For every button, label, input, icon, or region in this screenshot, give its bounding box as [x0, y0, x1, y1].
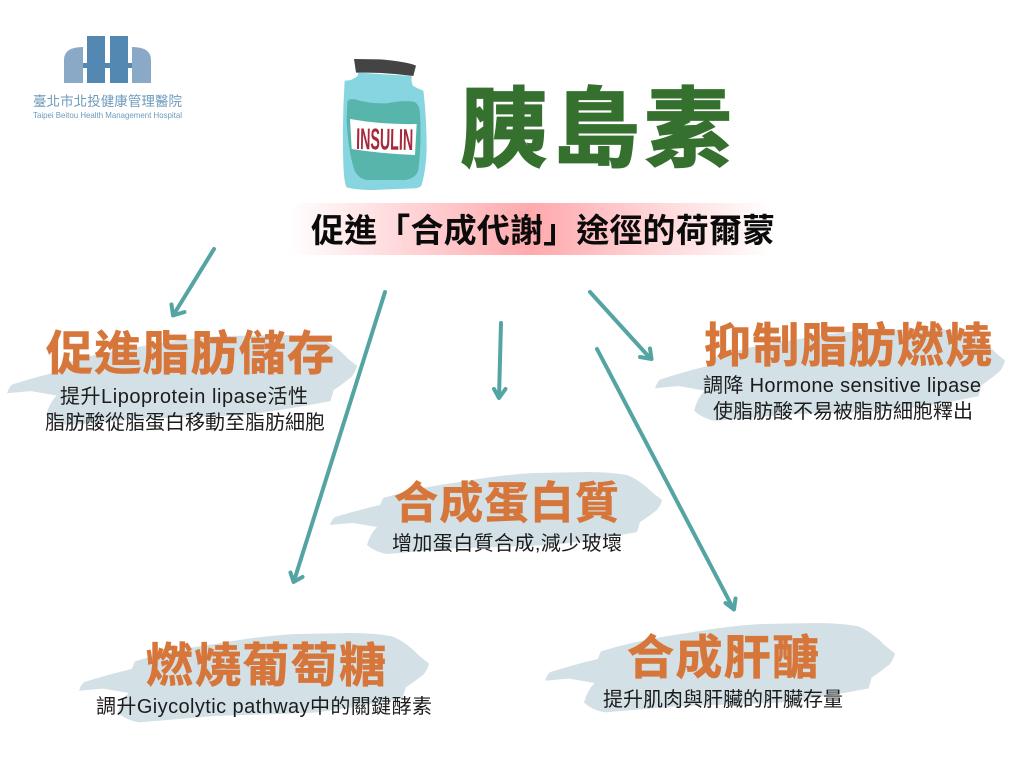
arrow: to inhibit fat burning [590, 292, 652, 359]
panel: glycogen synthesis [545, 623, 895, 712]
arrow: to fat storage [172, 249, 214, 316]
icon: insulin jar [343, 59, 427, 190]
panel: promote fat storage: 脂肪酸從脂蛋白移動至脂肪細胞 [45, 411, 325, 434]
panel: promote fat storage: 促進脂肪儲存 [46, 327, 334, 380]
panel: burn glucose: 調升Giycolytic pathway中的關鍵酵素 [96, 695, 432, 718]
panel: promote fat storage [7, 327, 357, 434]
arrow: to protein synthesis [494, 323, 506, 398]
panel: glycogen synthesis: 提升肌肉與肝臟的肝臟存量 [603, 688, 843, 711]
logo [33, 36, 182, 120]
arrow: to glucose burning [290, 292, 385, 582]
panel: promote fat storage: 提升Lipoprotein lipase活性 [60, 385, 308, 408]
subtitle band [290, 203, 775, 255]
panel: burn glucose: 燃燒葡萄糖 [146, 639, 386, 692]
icon: insulin jar: INSULIN [356, 123, 413, 157]
panel: inhibit fat burning: 抑制脂肪燃燒 [704, 319, 992, 372]
panel: glycogen synthesis: 合成肝醣 [627, 631, 819, 684]
panel: inhibit fat burning [655, 319, 1005, 423]
panel: protein synthesis: 合成蛋白質 [394, 479, 619, 528]
logo: Taipei Beitou Health Management Hospital [33, 110, 182, 120]
title: 胰島素 [460, 82, 736, 178]
panel: protein synthesis [330, 472, 662, 555]
arrow: to glycogen synthesis [597, 349, 736, 610]
panel: burn glucose [79, 633, 432, 722]
panel: inhibit fat burning: 使脂肪酸不易被脂肪細胞釋出 [713, 400, 973, 423]
subtitle band: 促進「合成代謝」途徑的荷爾蒙 [311, 212, 775, 249]
panel: protein synthesis: 增加蛋白質合成,減少玻壞 [392, 532, 622, 555]
logo: 臺北市北投健康管理醫院 [33, 93, 182, 109]
panel: inhibit fat burning: 調降 Hormone sensitive lipase [703, 374, 981, 397]
